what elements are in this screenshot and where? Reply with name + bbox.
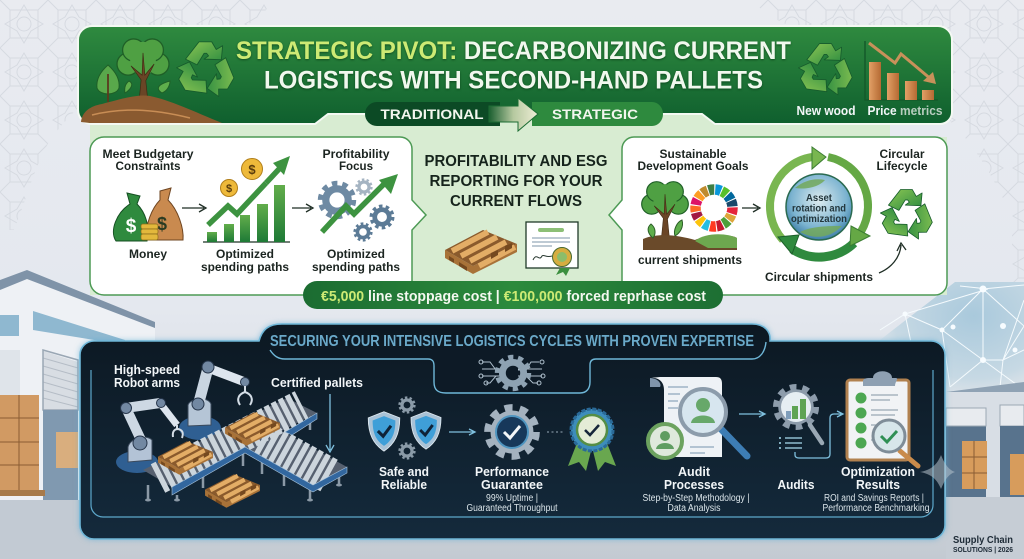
- arrow: [739, 411, 765, 417]
- label: optimization results: [822, 465, 930, 514]
- panel: centre heading: REPORTING FOR YOUR: [430, 173, 602, 190]
- label: high-speed robot arms: Robot arms: [114, 376, 180, 390]
- label: high-speed robot arms: [114, 363, 180, 390]
- chart: rising bars: $: [226, 183, 232, 195]
- heading: profitability focus: [322, 147, 390, 173]
- icon: money bags: $: [126, 216, 137, 237]
- icon: tree on ground: [642, 182, 737, 250]
- background pattern right: [752, 0, 1024, 300]
- label: strategic: STRATEGIC: [552, 106, 638, 122]
- footer credit: Supply Chain: [953, 534, 1013, 546]
- label: new wood: New wood: [796, 104, 856, 118]
- arrow: curved to recycle: [879, 243, 906, 273]
- icon: pallets on conveyor: [158, 412, 280, 508]
- title: STRATEGIC PIVOT: DECARBONIZING CURRENT: [236, 37, 791, 65]
- background pattern left: [0, 0, 272, 230]
- warehouse right: [946, 382, 1024, 559]
- section heading: SECURING YOUR INTENSIVE LOGISTICS CYCLES WITH PROVEN EXPERTISE: [270, 333, 754, 350]
- chart: rising bars: $: [248, 162, 256, 177]
- icon: globe with label: [786, 174, 852, 240]
- label: audit processes: Processes: [664, 478, 724, 492]
- heading: circular lifecycle: [876, 147, 928, 173]
- tab recess: [270, 342, 766, 393]
- arrow: [292, 204, 313, 212]
- label: audit processes: Data Analysis: [668, 503, 720, 514]
- icon: trees on mound: [81, 39, 222, 123]
- label: price metrics: Price metrics: [868, 104, 943, 118]
- panel: centre heading: [424, 153, 608, 210]
- icon: recycle left: [173, 42, 241, 102]
- icon: circuit gear: [479, 357, 545, 389]
- icon: conveyor: [143, 398, 347, 502]
- connector arrow to clipboard: [795, 411, 843, 458]
- label: high-speed robot arms: High-speed: [114, 363, 180, 377]
- label: optimized spending paths 1: [201, 247, 289, 274]
- label: optimized spending paths 2: Optimized: [327, 247, 385, 261]
- label: performance guarantee: Guarantee: [481, 478, 543, 492]
- heading: profitability focus: Profitability: [322, 147, 390, 161]
- icon: shields and gears: [368, 398, 441, 458]
- chart: rising bars: [203, 156, 290, 242]
- label: audits: Audits: [778, 478, 815, 492]
- sparkle: [920, 455, 955, 489]
- icon: audit document with magnifier: [648, 377, 747, 458]
- label: money: Money: [129, 247, 167, 261]
- icon: falling price chart: [865, 41, 938, 100]
- label: certified pallets: Certified pallets: [271, 376, 363, 390]
- heading: meet budgetary constraints: Constraints: [116, 159, 181, 173]
- heading: meet budgetary constraints: [102, 147, 194, 173]
- heading: sustainable development goals: Sustainable: [660, 147, 727, 161]
- network graphic: [880, 282, 1024, 395]
- dotted connector: [547, 431, 564, 433]
- label: audit processes: Audit: [678, 465, 711, 479]
- cost banner: €5,000 line stoppage cost | €100,000 forced reprhase cost: [321, 289, 706, 305]
- pale green centre panel: [90, 114, 947, 295]
- label: safe and reliable: Safe and: [379, 465, 429, 479]
- label: performance guarantee: Performance: [475, 465, 549, 479]
- heading: sustainable development goals: Development Goals: [638, 159, 749, 173]
- arrow: [182, 204, 206, 212]
- panel: budget to profitability: [90, 137, 426, 295]
- label: performance guarantee: Guaranteed Throughput: [466, 503, 558, 514]
- panel: centre heading: PROFITABILITY AND ESG: [424, 153, 608, 170]
- heading: circular lifecycle: Circular: [880, 147, 925, 161]
- heading: sustainable development goals: [638, 147, 749, 173]
- title: [236, 37, 791, 94]
- cost banner: [303, 281, 723, 309]
- label: optimized spending paths 1: Optimized: [216, 247, 274, 261]
- icon: globe with label: optimization: [791, 214, 847, 225]
- label: optimized spending paths 2: [312, 247, 400, 274]
- warehouse left: [0, 270, 155, 559]
- icon: circular ring arrows: [770, 147, 870, 257]
- footer credit: SOLUTIONS | 2026: [953, 545, 1013, 554]
- label: optimized spending paths 1: spending paths: [201, 260, 289, 274]
- label: safe and reliable: [379, 465, 429, 492]
- label: audit processes: Step-by-Step Methodology |: [642, 493, 750, 504]
- icon: gears with arrow: [321, 174, 398, 240]
- label: traditional: TRADITIONAL: [380, 106, 484, 122]
- icon: money bags: $: [157, 214, 167, 234]
- icon: globe with label: Asset: [806, 193, 833, 204]
- label: current shipments: current shipments: [638, 253, 742, 267]
- traditional to strategic switch: [365, 98, 663, 131]
- icon: audit gear chart: [776, 387, 822, 448]
- label: optimization results: Results: [856, 478, 900, 492]
- icon: pallet: [445, 230, 517, 274]
- header banner: [78, 26, 952, 124]
- title: LOGISTICS WITH SECOND-HAND PALLETS: [264, 66, 763, 94]
- icon: SDG colour wheel: [696, 190, 732, 226]
- arrow: [742, 204, 760, 212]
- icon: robot arm rear: [179, 361, 252, 440]
- arrow: to conveyor: [326, 394, 334, 452]
- heading: profitability focus: Focus: [339, 159, 373, 173]
- label: performance guarantee: [466, 465, 558, 514]
- footer credit: [953, 534, 1013, 554]
- panel: sustainable to circular: [609, 137, 947, 295]
- label: optimization results: Optimization: [841, 465, 915, 479]
- label: performance guarantee: 99% Uptime |: [486, 493, 538, 504]
- icon: recycle new wood: [795, 44, 858, 100]
- icon: performance gear: [488, 408, 536, 456]
- label: audit processes: [642, 465, 750, 514]
- icon: award badge: [568, 409, 616, 471]
- heading: circular lifecycle: Lifecycle: [876, 159, 928, 173]
- icon: robot arm front: [116, 398, 183, 473]
- label: optimized spending paths 2: spending paths: [312, 260, 400, 274]
- icon: globe with label: rotation and: [792, 204, 846, 214]
- label: optimization results: Performance Benchmarking: [822, 503, 930, 514]
- icon: recycle right: [877, 189, 938, 244]
- icon: clipboard checklist: [847, 371, 918, 466]
- panel: dark logistics: [80, 324, 945, 539]
- inner frame: [91, 370, 933, 517]
- heading: meet budgetary constraints: Meet Budgetary: [102, 147, 194, 161]
- label: safe and reliable: Reliable: [381, 478, 427, 492]
- icon: certificate: [526, 222, 578, 276]
- arrow: [449, 429, 475, 435]
- panel: centre heading: CURRENT FLOWS: [450, 193, 582, 210]
- label: optimization results: ROI and Savings Reports |: [824, 493, 924, 504]
- label: circular shipments: Circular shipments: [765, 270, 873, 284]
- icon: money bags: [113, 188, 183, 241]
